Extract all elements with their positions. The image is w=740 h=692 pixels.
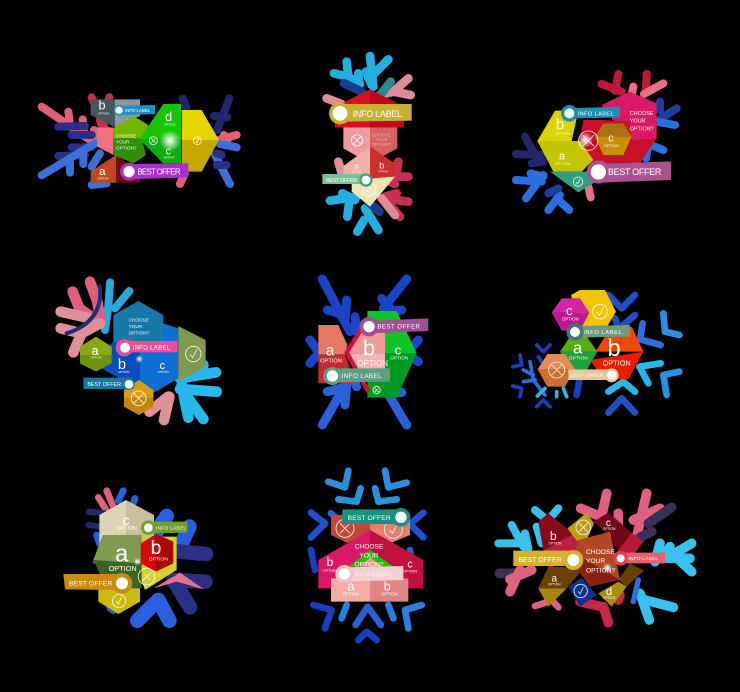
option letters: c (122, 512, 129, 528)
option letters: d (606, 586, 612, 598)
shapes (537, 92, 657, 192)
info label: INFO LABEL (583, 330, 622, 336)
question text: CHOOSE (129, 317, 149, 322)
question text: YOUR (116, 139, 130, 144)
info label (329, 102, 412, 124)
info label (141, 520, 187, 535)
question text (129, 317, 150, 335)
option letters: b (118, 357, 126, 373)
question text (372, 133, 391, 147)
option letters: b (384, 580, 391, 594)
question text: OPTION? (586, 567, 616, 574)
info label: INFO LABEL (353, 109, 402, 119)
best offer label: BEST OFFER (87, 382, 121, 388)
question text: YOUR (375, 137, 388, 142)
info label (116, 339, 177, 356)
best offer label (63, 573, 132, 594)
icon: cross (579, 131, 598, 150)
icon: cross (336, 519, 354, 537)
shapes (91, 99, 219, 183)
option letters: OPTION (548, 583, 561, 587)
snowflake (513, 295, 679, 413)
shapes (80, 301, 206, 415)
info label: INFO LABEL (578, 111, 614, 117)
option letters: a (573, 338, 583, 357)
question text: CHOOSE (355, 543, 384, 550)
best offer label (342, 508, 410, 527)
option letters: OPTION (90, 356, 102, 360)
option letters (109, 512, 168, 573)
option letters: OPTION (357, 359, 388, 368)
option letters: OPTION (164, 122, 176, 126)
best offer label: BEST OFFER (608, 167, 662, 177)
snowflake (498, 493, 692, 623)
question text: OPTION? (116, 146, 137, 151)
question text: YOUR (129, 324, 143, 329)
shapes (538, 290, 643, 387)
option letters: OPTION (403, 569, 417, 573)
icon: check (186, 346, 201, 362)
icon: cross (351, 135, 363, 146)
info label: INFO LABEL (156, 526, 186, 531)
question text: YOUR (586, 558, 605, 565)
option letters: OPTION (390, 355, 408, 360)
panel: cream red badge bottom left (63, 491, 206, 621)
snowflake (327, 56, 411, 232)
option letters (90, 344, 169, 374)
panel: green yellow badge top left (42, 97, 237, 185)
question text (116, 133, 137, 151)
option letters: a (552, 574, 558, 585)
info label (566, 323, 630, 341)
option letters: a (347, 579, 355, 594)
option letters: a (559, 151, 566, 163)
best offer label: BEST OFFER (571, 373, 604, 379)
question text: OPTION? (372, 142, 391, 147)
question text (630, 111, 654, 133)
option letters (548, 518, 616, 600)
option letters: OPTION (603, 527, 616, 531)
shapes (318, 515, 423, 602)
option letters: OPTION (163, 156, 175, 160)
option letters: OPTION (97, 177, 109, 181)
option letters: a (326, 343, 335, 360)
snowflake (61, 282, 217, 420)
option letters: c (566, 303, 573, 318)
panel: dark red gold badge bottom right (498, 493, 692, 623)
question text: OPTION? (354, 562, 384, 569)
question text: CHOOSE (630, 111, 654, 117)
best offer label: BEST OFFER (137, 167, 181, 176)
best offer label (513, 550, 583, 570)
option letters: OPTION (569, 355, 588, 361)
icon: check (193, 137, 201, 145)
option letters: OPTION (149, 556, 168, 562)
option letters: OPTION (378, 169, 388, 173)
option letters: OPTION (549, 542, 562, 546)
option letters: OPTION (116, 526, 137, 532)
option letters: OPTION (555, 161, 570, 166)
option letters: OPTION (323, 569, 337, 573)
best offer label: BEST OFFER (518, 557, 562, 564)
option letters: b (550, 529, 557, 543)
shapes (93, 500, 177, 614)
option letters: OPTION (109, 564, 137, 573)
option letters: OPTION (381, 591, 398, 596)
option letters (97, 98, 176, 181)
icon: check (593, 304, 607, 319)
option letters: b (556, 116, 564, 133)
icon: check (573, 177, 583, 186)
option letters: d (165, 110, 172, 124)
option letters: OPTION (320, 358, 342, 364)
icon: cross (138, 568, 155, 585)
info label: INFO LABEL (628, 556, 659, 562)
option letters: OPTION (118, 370, 129, 374)
option letters: c (608, 132, 614, 144)
option letters (323, 555, 417, 596)
option letters: OPTION (603, 596, 616, 600)
option letters: b (607, 335, 621, 362)
question text: YOUR (359, 553, 379, 560)
option letters: b (363, 336, 375, 361)
icon: check (112, 594, 126, 608)
icon: check (384, 520, 402, 538)
snowflake (516, 74, 677, 210)
option letters: c (166, 146, 172, 158)
question text: YOUR (630, 119, 646, 125)
best offer label: BEST OFFER (348, 515, 391, 522)
option letters: b (98, 98, 106, 112)
option letters (320, 336, 408, 368)
best offer label (359, 317, 428, 336)
option letters: OPTION (352, 169, 362, 173)
question text: CHOOSE (116, 133, 136, 138)
pink wedge (153, 573, 204, 589)
info label (335, 565, 403, 583)
option letters: a (91, 344, 99, 358)
snowflake (42, 97, 237, 185)
icon: cross (549, 362, 565, 378)
best offer label (322, 173, 373, 187)
info label (114, 105, 155, 116)
shapes (538, 513, 644, 607)
icon: cross (576, 520, 591, 535)
shapes (335, 89, 404, 207)
best offer label: BEST OFFER (377, 325, 421, 331)
info label: INFO LABEL (342, 373, 382, 380)
question text: OPTION? (129, 330, 150, 335)
best offer label (587, 160, 671, 184)
panel: red cream badge top centre (322, 56, 412, 232)
option letters: OPTION (343, 591, 359, 596)
info label: INFO LABEL (133, 346, 171, 352)
best offer label: BEST OFFER (69, 580, 113, 587)
option letters: OPTION (555, 131, 570, 136)
info label: INFO LABEL (355, 571, 392, 578)
option letters (555, 116, 619, 166)
info label: INFO LABEL (125, 108, 151, 113)
icon: check (363, 183, 376, 196)
option letters: OPTION (98, 112, 109, 116)
best offer label (83, 378, 135, 390)
option letters: c (606, 518, 611, 529)
question text (354, 543, 384, 569)
option letters: c (407, 558, 413, 570)
option letters: b (379, 161, 384, 171)
snowflake (311, 471, 423, 640)
option letters (352, 161, 388, 173)
panel: crimson pink badge bottom centre (311, 471, 423, 640)
question text: CHOOSE (586, 549, 615, 556)
panel: colourful hexagon cluster middle right (513, 290, 679, 413)
option letters: c (395, 342, 402, 357)
option letters: b (327, 555, 334, 569)
info label (323, 367, 390, 385)
option letters: OPTION (604, 143, 619, 148)
option letters: b (151, 538, 161, 559)
best offer label (568, 368, 619, 382)
icon: check (574, 584, 587, 598)
snowflake (88, 491, 206, 621)
best offer label (120, 163, 188, 181)
option letters: OPTION (562, 317, 579, 322)
option letters: a (99, 166, 106, 178)
option letters: a (354, 161, 359, 171)
option letters: OPTION (157, 370, 169, 374)
panel: salmon green badge centre (310, 279, 428, 425)
option letters (562, 303, 631, 367)
icon: cross (149, 137, 157, 145)
question text: CHOOSE (372, 133, 391, 138)
panel: blue hexagon badge middle left (61, 282, 217, 420)
info label (613, 551, 665, 566)
info label (561, 105, 620, 122)
icon: cross (131, 391, 146, 406)
icon: cross (373, 386, 380, 394)
option letters: OPTION (603, 358, 631, 367)
option letters: a (115, 541, 129, 568)
question text (586, 549, 616, 574)
snowflake (310, 279, 418, 425)
shapes (318, 311, 417, 398)
question text: OPTION? (630, 127, 654, 133)
panel: yellow crimson badge top right (516, 74, 677, 210)
option letters: c (159, 360, 165, 372)
best offer label: BEST OFFER (326, 178, 357, 184)
